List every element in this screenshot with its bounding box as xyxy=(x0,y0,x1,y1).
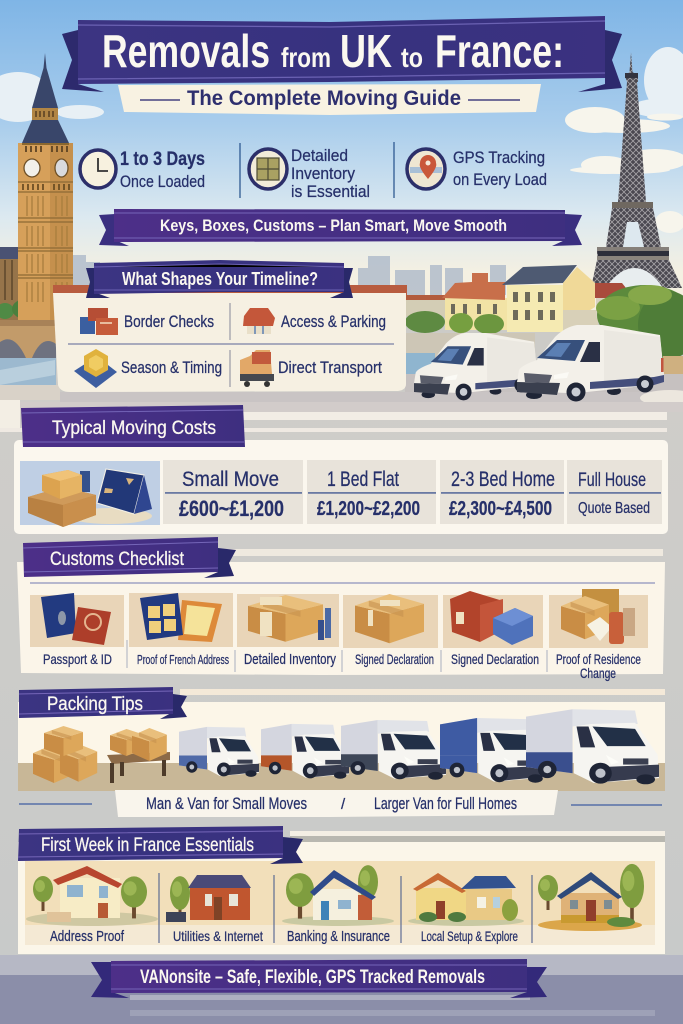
cell: 1 bed flat xyxy=(307,460,436,524)
cell: 1 bed flat: £1,200~£2,200 xyxy=(317,498,420,520)
scene: skyline xyxy=(72,255,506,300)
icon: Big Ben tower xyxy=(18,53,73,320)
stat: inventory: Detailed xyxy=(291,146,348,165)
item: address proof xyxy=(26,866,158,945)
title banner: Removals xyxy=(102,25,270,77)
item: utilities and internet: Utilities & Internet xyxy=(173,928,263,944)
image: boxes and folder xyxy=(20,461,160,527)
icon: access and parking xyxy=(243,308,275,334)
cell: small move xyxy=(163,460,303,524)
background: sky xyxy=(0,0,683,310)
item: proof of French address xyxy=(129,593,233,667)
footer background xyxy=(0,955,683,1024)
icon: truck 3 xyxy=(341,720,446,780)
stat: delivery time xyxy=(80,149,205,191)
stat: GPS tracking: GPS Tracking xyxy=(453,148,545,167)
icon: direct transport xyxy=(240,350,274,387)
panel: what shapes your timeline xyxy=(53,260,407,392)
item: signed declaration: Signed Declaration xyxy=(355,651,434,667)
cell: full house: Quote Based xyxy=(578,500,650,517)
item: local setup and explore xyxy=(408,873,524,944)
item: access and parking: Access & Parking xyxy=(281,312,386,331)
icon: Eiffel Tower xyxy=(591,52,682,288)
banner: timeline heading xyxy=(86,260,353,298)
panel: typical moving costs xyxy=(14,440,668,534)
icon: boxes on table xyxy=(107,728,170,783)
banner: typical moving costs: Typical Moving Costs xyxy=(52,418,216,439)
icon: map pin xyxy=(407,149,445,189)
subtitle ribbon xyxy=(118,84,541,115)
footer banner: VANonsite – Safe, Flexible, GPS Tracked Removals xyxy=(140,967,485,988)
item: direct transport xyxy=(240,350,382,387)
caption: van guidance: / xyxy=(341,796,346,813)
title banner: France: xyxy=(435,25,564,77)
cell: 2-3 bed home: 2-3 Bed Home xyxy=(451,468,555,491)
icon: stacked boxes xyxy=(33,726,97,783)
banner: timeline heading: What Shapes Your Timeline? xyxy=(122,269,318,289)
item: proof of residence change: Change xyxy=(580,665,616,681)
icon: truck 2 xyxy=(261,724,349,779)
item: passport and ID: Passport & ID xyxy=(43,651,112,667)
title banner xyxy=(62,16,622,92)
stat: inventory: Inventory xyxy=(291,164,355,183)
item: direct transport: Direct Transport xyxy=(278,358,382,377)
item: proof of French address: Proof of French Address xyxy=(137,652,229,667)
icon: truck 4 xyxy=(440,718,546,783)
item: suburban house xyxy=(538,864,644,931)
banner: packing tips xyxy=(19,687,187,719)
icon: border checks xyxy=(80,308,118,335)
item: passport and ID xyxy=(30,593,124,667)
banner: customs checklist xyxy=(23,537,236,578)
icon: truck 5 xyxy=(526,709,659,784)
scene: French buildings xyxy=(405,265,634,332)
item: proof of residence change: Proof of Residence xyxy=(556,651,641,667)
icon: inventory grid xyxy=(249,149,287,189)
item: banking and insurance xyxy=(282,865,394,945)
title banner: to xyxy=(401,42,423,73)
item: signed declaration red and blue boxes xyxy=(443,591,543,667)
scene: trees xyxy=(405,285,683,359)
item: access and parking xyxy=(243,308,386,334)
cell: 1 bed flat: 1 Bed Flat xyxy=(327,468,399,491)
panel: customs checklist xyxy=(17,549,665,681)
stat: inventory: is Essential xyxy=(291,182,370,201)
slogan banner xyxy=(99,209,582,246)
item: address proof: Address Proof xyxy=(50,928,125,945)
banner: typical moving costs xyxy=(21,405,245,447)
item: banking and insurance: Banking & Insurance xyxy=(287,928,390,945)
item: detailed inventory: Detailed Inventory xyxy=(244,651,336,668)
item: signed declaration xyxy=(343,594,438,667)
stat: GPS tracking xyxy=(407,148,547,189)
slogan banner: Keys, Boxes, Customs – Plan Smart, Move Smooth xyxy=(160,216,507,235)
cell: 2-3 bed home: £2,300~£4,500 xyxy=(449,498,552,520)
item: utilities and internet xyxy=(166,875,263,944)
panel: first week in France essentials xyxy=(18,831,665,954)
caption: van guidance: Man & Van for Small Moves xyxy=(146,794,307,813)
item: detailed inventory xyxy=(237,594,339,668)
banner: first week in France essentials xyxy=(18,826,303,864)
title banner: UK xyxy=(340,25,392,77)
banner: packing tips: Packing Tips xyxy=(47,694,143,715)
item: season and timing: Season & Timing xyxy=(121,358,222,377)
caption: van guidance: Larger Van for Full Homes xyxy=(374,794,517,813)
cell: small move: Small Move xyxy=(182,468,279,491)
scene: river wall and ground xyxy=(0,333,683,412)
item: border checks xyxy=(80,308,214,335)
item: border checks: Border Checks xyxy=(124,312,214,331)
stat: GPS tracking: on Every Load xyxy=(453,170,547,189)
item: season and timing xyxy=(74,349,222,388)
icon: white van large xyxy=(517,325,664,402)
stat: inventory xyxy=(249,146,370,201)
background stripes xyxy=(0,400,20,431)
item: proof of residence change xyxy=(549,589,648,681)
item: local setup and explore: Local Setup & Explore xyxy=(421,928,518,944)
background: lower band xyxy=(0,400,683,970)
panel: packing tips xyxy=(18,689,665,817)
title banner: from xyxy=(281,42,331,73)
stat: delivery time: Once Loaded xyxy=(120,172,205,191)
cell: small move: £600~£1,200 xyxy=(179,496,284,521)
cell: full house xyxy=(567,460,662,524)
footer banner xyxy=(91,959,547,998)
icon: truck 1 xyxy=(179,727,259,777)
cell: 2-3 bed home xyxy=(440,460,564,524)
icon: white van small xyxy=(414,333,537,400)
banner: first week in France essentials: First Week in France Essentials xyxy=(41,835,254,856)
banner: customs checklist: Customs Checklist xyxy=(50,549,185,570)
clouds xyxy=(0,47,683,233)
icon: season and timing xyxy=(74,349,117,388)
scene: London parliament and bridge xyxy=(0,247,56,400)
stat: delivery time: 1 to 3 Days xyxy=(120,149,205,170)
cell: full house: Full House xyxy=(578,470,646,491)
subtitle ribbon: The Complete Moving Guide xyxy=(187,87,461,110)
item: signed declaration red and blue boxes: Signed Declaration xyxy=(451,651,539,667)
caption: van guidance xyxy=(115,790,558,817)
icon: clock xyxy=(80,150,116,188)
